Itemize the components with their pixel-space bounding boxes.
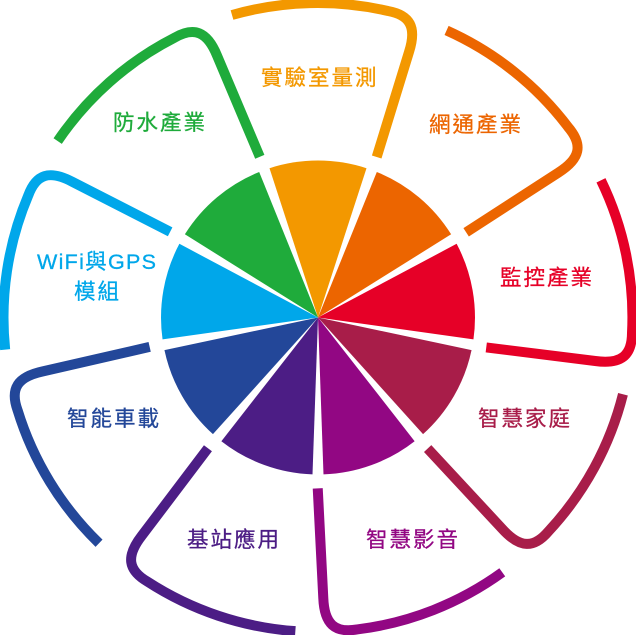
label: 實驗室量測: 實驗室量測 xyxy=(261,66,379,90)
wedge: 智能車載 xyxy=(158,275,342,438)
label: WiFi與GPS模組 xyxy=(37,250,157,304)
label: 智慧家庭: 智慧家庭 xyxy=(478,407,572,431)
outline: 監控產業 xyxy=(461,178,636,382)
wedge: 網通產業 xyxy=(281,166,456,349)
outline: 智能車載 xyxy=(0,316,222,549)
panel: 智慧影音 xyxy=(272,301,506,635)
wedge: 防水產業 xyxy=(180,166,355,349)
panel: 智慧家庭 xyxy=(294,275,633,556)
label: 網通產業: 網通產業 xyxy=(429,113,523,137)
panel: 防水產業 xyxy=(50,16,355,349)
panel: WiFi與GPS模組 xyxy=(0,170,326,374)
outline: 基站應用 xyxy=(122,436,344,635)
panel: 實驗室量測 xyxy=(232,3,412,318)
outline: 實驗室量測 xyxy=(232,3,412,157)
panel: 網通產業 xyxy=(281,21,592,349)
outline: WiFi與GPS模組 xyxy=(0,170,176,374)
outline: 網通產業 xyxy=(355,21,592,255)
label: 基站應用: 基站應用 xyxy=(187,527,281,552)
wedge: 監控產業 xyxy=(310,242,481,365)
wedge: 實驗室量測 xyxy=(270,161,366,318)
wedge: 智慧影音 xyxy=(272,301,417,482)
wedge: 智慧家庭 xyxy=(294,275,478,438)
outline: 防水產業 xyxy=(50,16,287,250)
panel: 基站應用 xyxy=(122,301,364,635)
panel: 監控產業 xyxy=(310,178,636,382)
label: 智能車載: 智能車載 xyxy=(67,407,161,431)
panel: 智能車載 xyxy=(0,275,342,549)
wedge: 基站應用 xyxy=(219,301,364,482)
label: 防水產業: 防水產業 xyxy=(113,111,207,135)
label: 監控產業: 監控產業 xyxy=(500,266,594,290)
label: 智慧影音: 智慧影音 xyxy=(366,528,460,552)
wedge: WiFi與GPS模組 xyxy=(155,242,326,365)
outline: 智慧影音 xyxy=(284,439,506,635)
label: WiFi與GPS模組: 模組 xyxy=(74,280,121,304)
label: WiFi與GPS模組: WiFi與GPS xyxy=(37,250,157,274)
outline: 智慧家庭 xyxy=(410,323,633,556)
